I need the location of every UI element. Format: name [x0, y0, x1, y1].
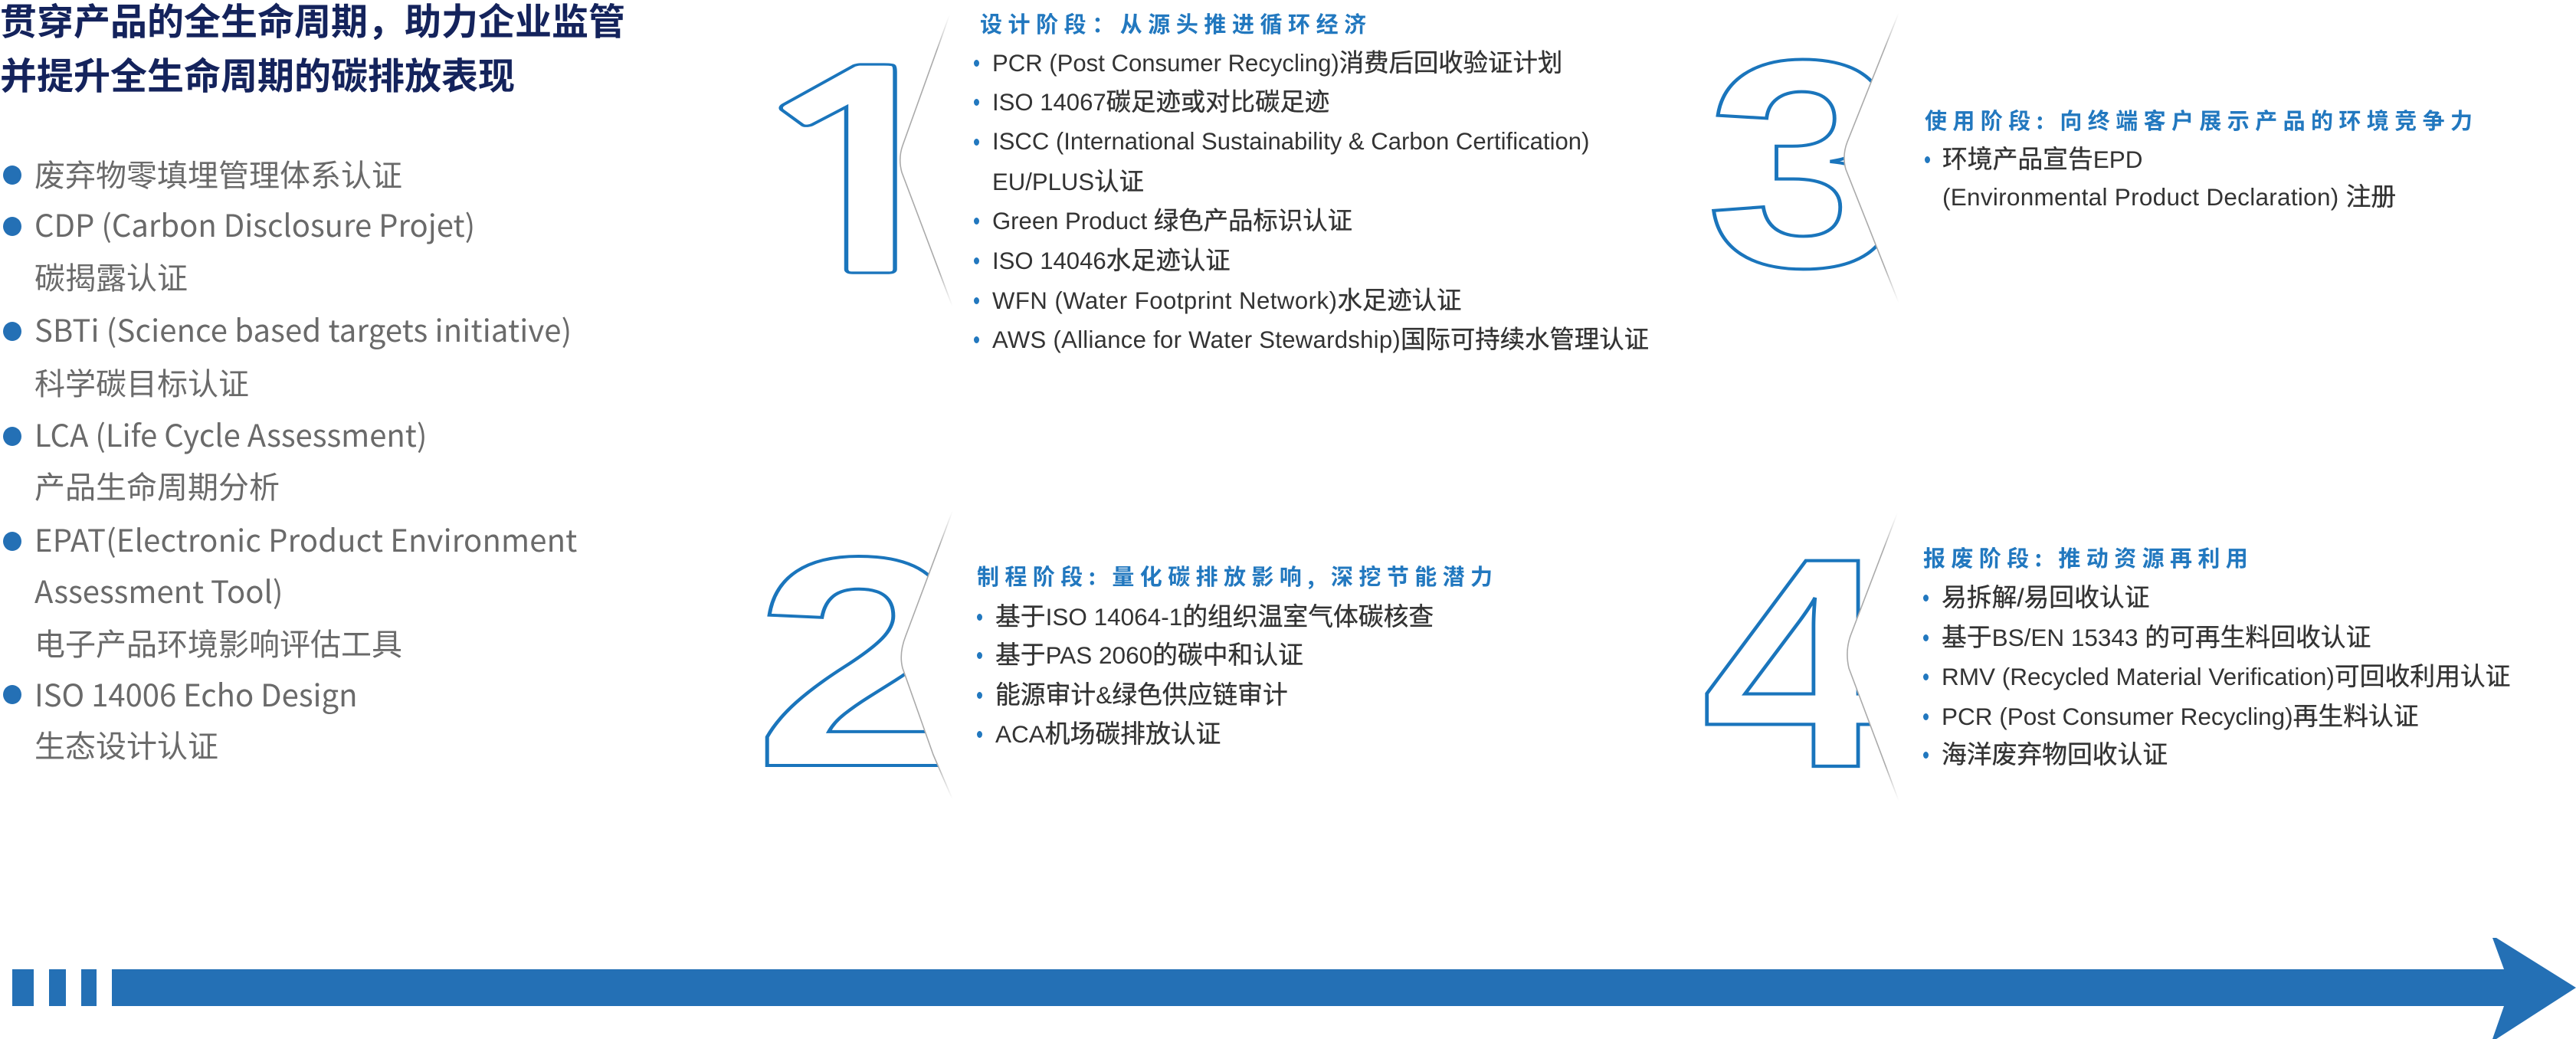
item: ISO 14046水足迹认证 [992, 247, 1231, 274]
item: 海洋废弃物回收认证 [1942, 740, 2168, 769]
item: PCR (Post Consumer Recycling)再生料认证 [1942, 702, 2419, 730]
list item: LCA [3, 411, 427, 507]
panel: stage 1 design [723, 7, 1649, 353]
panel: stage 2 process [754, 494, 1498, 829]
list item: EPAT: 电子产品环境影响评估工具 [34, 620, 402, 664]
list item: EPAT: EPAT(Electronic Product Environment [34, 516, 577, 561]
item: ACA机场碳排放认证 [995, 719, 1221, 748]
number 4: 4 [1702, 496, 1893, 830]
item: 环境产品宣告EPD [1942, 145, 2143, 173]
item: PCR (Post Consumer Recycling)消费后回收验证计划 [992, 49, 1562, 77]
item: 易拆解/易回收认证 [1942, 583, 2150, 611]
panel: stage 4 disposal [1702, 496, 2510, 830]
item: 能源审计&绿色供应链审计 [995, 680, 1288, 709]
list item: LCA: 产品生命周期分析 [34, 463, 280, 507]
list item: waste: 废弃物零填埋管理体系认证 [34, 151, 402, 195]
heading: 制程阶段: 量化碳排放影响, 深挖节能潜力 [977, 559, 1498, 592]
item continuation: (Environmental Product Declaration) 注册 [1942, 182, 2396, 211]
list item: CDP [3, 202, 475, 298]
heading: 设计阶段：从源头推进循环经济 [980, 7, 1372, 39]
list item: SBTi: SBTi (Science based targets initiative) [34, 306, 572, 351]
title [0, 0, 625, 100]
list item: LCA: LCA (Life Cycle Assessment) [34, 411, 427, 456]
item: WFN (Water Footprint Network)水足迹认证 [992, 287, 1461, 314]
list item: ISO 14006 [3, 671, 358, 766]
item: ISCC (International Sustainability & Carbon Certification) [992, 128, 1589, 155]
heading: 报废阶段: 推动资源再利用 [1923, 541, 2253, 573]
number 1: 1 [723, 41, 998, 313]
list item: CDP: 碳揭露认证 [34, 254, 188, 298]
item: RMV (Recycled Material Verification)可回收利用认证 [1942, 662, 2510, 690]
item: 基于BS/EN 15343 的可再生料回收认证 [1942, 623, 2371, 651]
item: ISO 14067碳足迹或对比碳足迹 [992, 88, 1329, 116]
item: 基于ISO 14064-1的组织温室气体碳核查 [995, 602, 1434, 631]
item: Green Product 绿色产品标识认证 [992, 207, 1352, 234]
title: 并提升全生命周期的碳排放表现 [0, 46, 515, 100]
list item: EPAT [3, 516, 577, 664]
heading: 使用阶段: 向终端客户展示产品的环境竞争力 [1925, 103, 2478, 136]
item continuation: EU/PLUS认证 [992, 168, 1144, 195]
list item: ISO 14006: 生态设计认证 [34, 722, 218, 766]
number 3: 3 [1706, 0, 1903, 329]
item: 基于PAS 2060的碳中和认证 [995, 641, 1303, 669]
item: AWS (Alliance for Water Stewardship)国际可持续水管理认证 [992, 326, 1649, 353]
list item: SBTi [3, 306, 572, 404]
list item: ISO 14006: ISO 14006 Echo Design [34, 671, 358, 716]
list item: SBTi: 科学碳目标认证 [34, 359, 249, 404]
list item: CDP: CDP (Carbon Disclosure Projet) [34, 202, 475, 246]
list item: EPAT: Assessment Tool) [34, 568, 283, 612]
panel: stage 3 use [1706, 0, 2478, 329]
panel: certification list [3, 151, 577, 766]
number 2: 2 [754, 494, 965, 829]
